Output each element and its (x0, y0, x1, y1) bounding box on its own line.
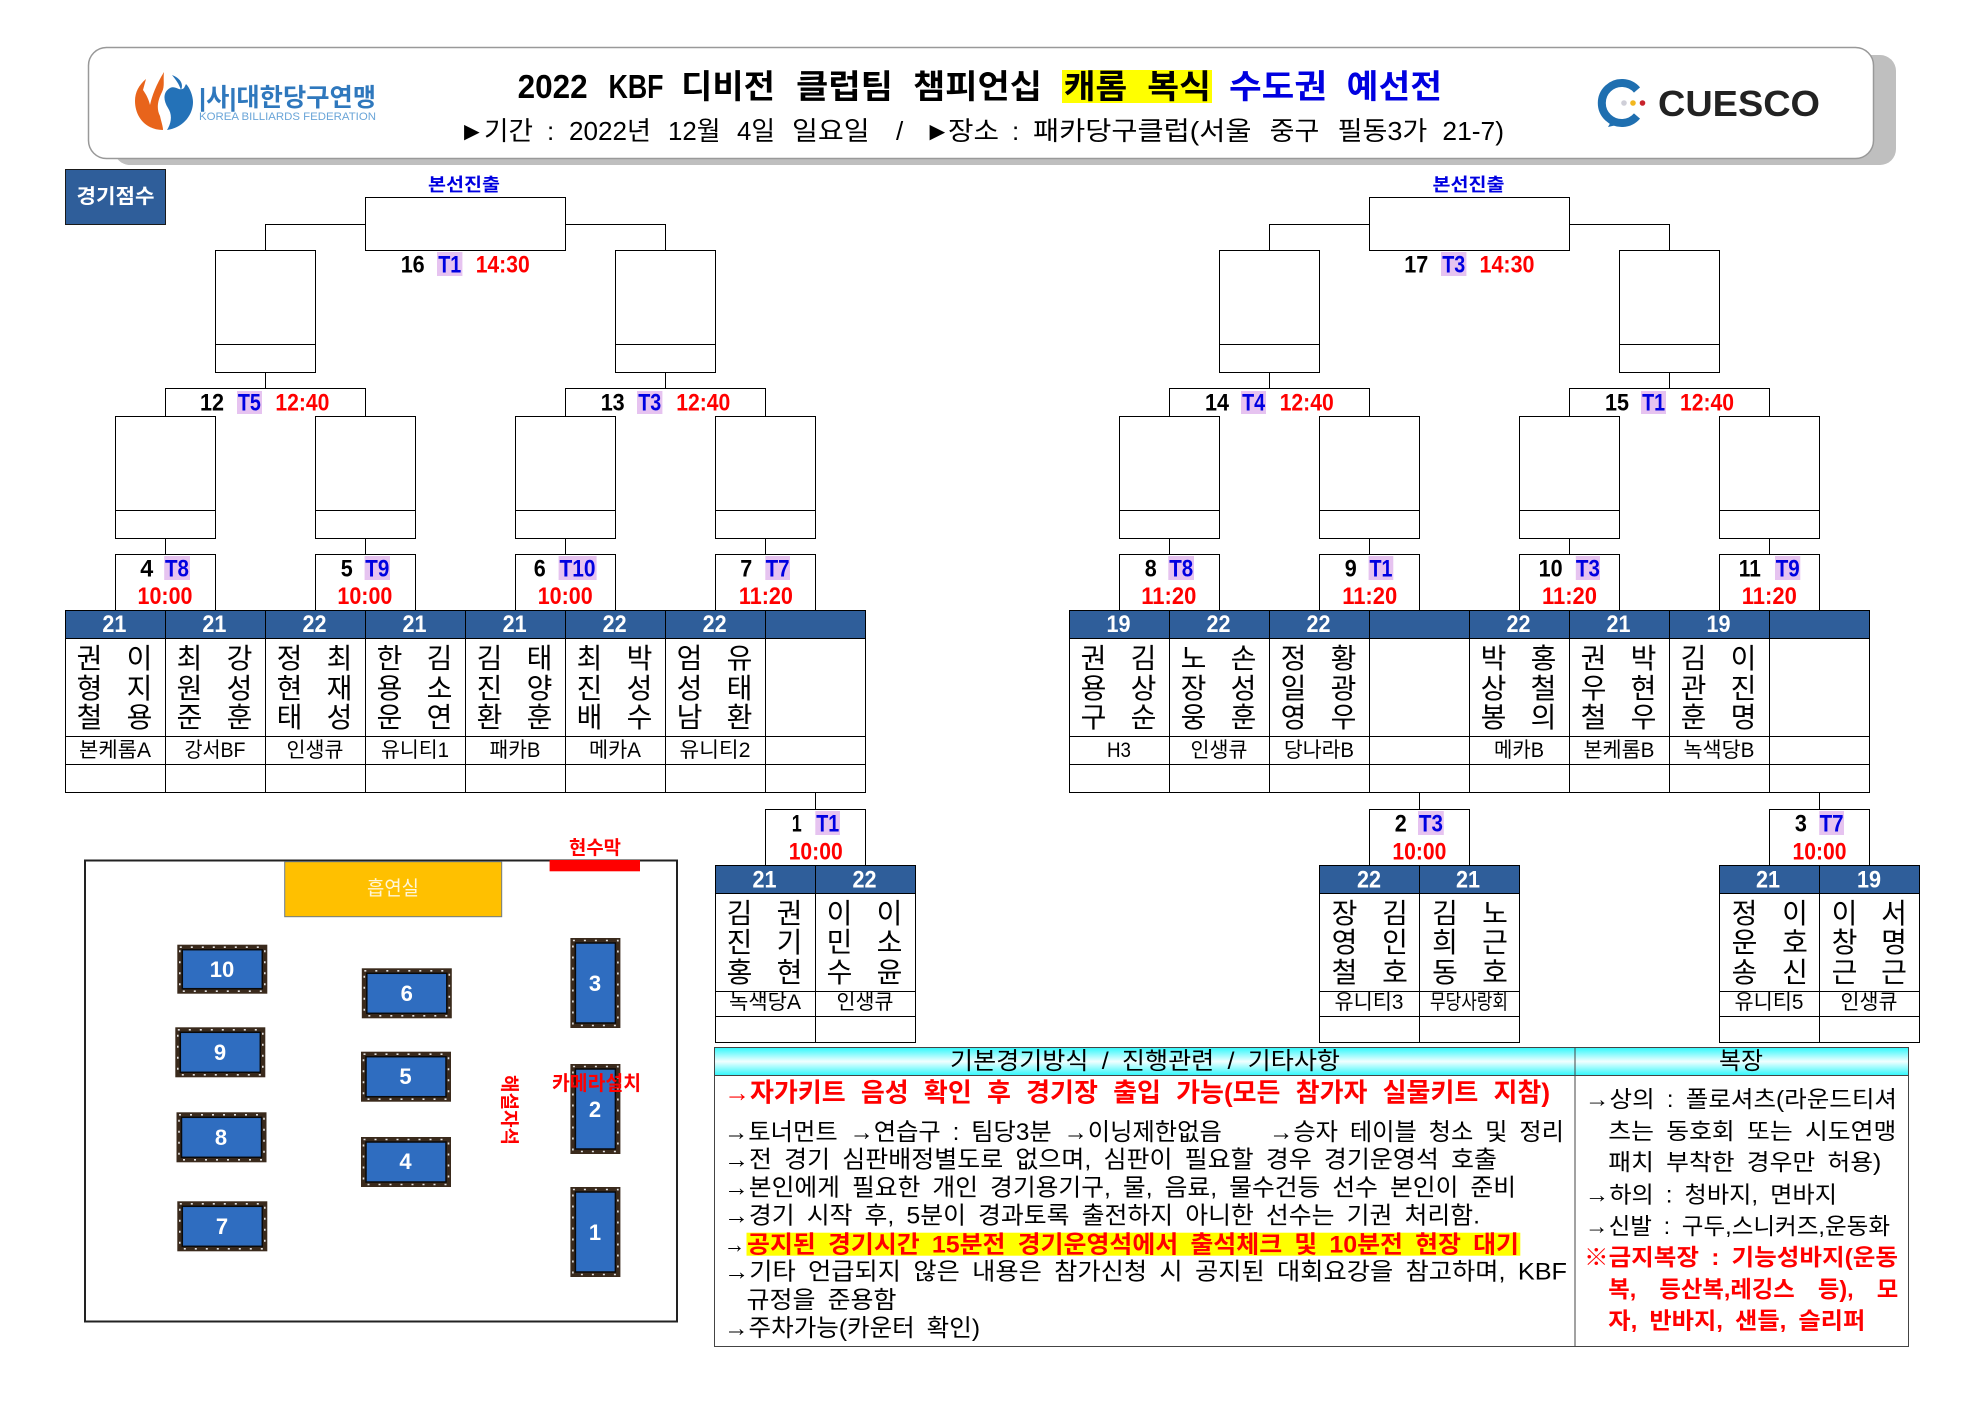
match 7: 11:20 (739, 583, 793, 610)
quarterfinal boxes right (1120, 416, 1820, 538)
title: 복식 (1147, 68, 1211, 105)
match 2 block: 노근호 (1482, 898, 1508, 988)
table 7 (177, 1201, 267, 1251)
match 17 label (1404, 252, 1534, 278)
team names left: 인생큐 (286, 739, 344, 762)
subtitle: date and venue: 일요일 (792, 116, 870, 146)
match 1 block: 권기현 (777, 898, 802, 988)
subtitle: date and venue: 중구 (1270, 116, 1319, 146)
team names left (79, 739, 750, 762)
match 17 label: 14:30 (1480, 252, 1534, 278)
match 14 box: 12:40 (1280, 390, 1334, 416)
scores row left: 22 (603, 611, 627, 638)
match 10 (1539, 556, 1600, 610)
smoking room: 흡연실 (367, 877, 419, 900)
match 9: 11:20 (1342, 583, 1397, 610)
match 5: T9 (365, 556, 389, 582)
match 3 block: 이호신 (1782, 898, 1808, 988)
team names left: 강서BF (184, 739, 246, 762)
main draw label left: 본선진출 (428, 175, 500, 195)
match 8: 8 (1145, 556, 1157, 582)
player names left: 김소연 (427, 643, 452, 733)
scores row left (102, 611, 727, 638)
player names left: 한용운 (377, 643, 402, 733)
subtitle: date and venue: 장소 (948, 116, 999, 146)
player names right: 손성훈 (1231, 643, 1256, 733)
logo: Korea Billiards Federation (135, 72, 376, 130)
match 5 (337, 556, 392, 610)
quarterfinal boxes left (116, 416, 816, 538)
table 3 (570, 938, 620, 1028)
player names left: 최재성 (327, 643, 352, 733)
table 4: 4 (399, 1149, 412, 1174)
game score badge: 경기점수 (76, 185, 154, 208)
match 2 block (1320, 792, 1520, 1042)
match 13 box: T3 (638, 390, 661, 416)
team names right: 메카B (1494, 739, 1544, 762)
match 2 block: T3 (1419, 810, 1443, 838)
match 15 box: 12:40 (1680, 390, 1734, 416)
match 12 box: 12 (200, 390, 224, 416)
match 3 block: 유니티5 (1734, 991, 1804, 1014)
team names right: 인생큐 (1190, 739, 1248, 762)
rules text: 공지된 경기시간 15분전 경기운영석에서 출석체크 및 10분전 현장 대기 (747, 1232, 1519, 1258)
match 1 block: 인생큐 (836, 991, 894, 1014)
final box right (1370, 198, 1570, 250)
match 10: 11:20 (1542, 583, 1597, 610)
banner (550, 837, 640, 871)
team names right: H3 (1107, 739, 1131, 762)
match 3 block: 19 (1857, 866, 1881, 894)
rules text: →기타 언급되지 않은 내용은 참가신청 시 공지된 대회요강을 참고하며, KBF (724, 1258, 1567, 1286)
table 8 (176, 1112, 266, 1162)
player names right: 박현우 (1631, 643, 1656, 733)
main draw label right: 본선진출 (1432, 175, 1504, 195)
right player table (1070, 610, 1870, 792)
player names right: 노장웅 (1181, 643, 1206, 733)
match headers right row (1120, 554, 1820, 610)
match 14 box: T4 (1242, 390, 1265, 416)
player names right: 김상순 (1131, 643, 1156, 733)
dress code heading: 복장 (1719, 1048, 1763, 1075)
team names left: 본케롬A (79, 739, 151, 762)
title: 디비전 (681, 68, 775, 105)
match headers left row (116, 554, 816, 610)
table 2: 2 (589, 1097, 601, 1122)
match 1 block: 1 (792, 810, 802, 838)
table 1: 1 (589, 1220, 601, 1245)
table 5: 5 (399, 1064, 412, 1089)
title: 챔피언십 (913, 68, 1042, 105)
banner: 현수막 (569, 837, 621, 859)
match 16 label (401, 252, 530, 278)
match 13 box (566, 388, 766, 416)
rules text: →본인에게 필요한 개인 경기용기구, 물, 음료, 물수건등 선수 본인이 준비 (724, 1174, 1516, 1202)
match 3 block: 서명근 (1881, 898, 1907, 988)
title: 클럽팀 (796, 68, 893, 105)
subtitle: date and venue (459, 116, 1504, 146)
scores row right: 19 (1106, 611, 1130, 638)
final box left (366, 198, 566, 250)
dress code text: 자, 반바지, 샌들, 슬리퍼 (1608, 1308, 1865, 1334)
match 15 box: T1 (1642, 390, 1665, 416)
match 14 box: 14 (1205, 390, 1229, 416)
rules text: 규정을 준용함 (746, 1287, 896, 1314)
match 4: 4 (140, 556, 154, 582)
match 1 block: 21 (752, 866, 776, 894)
match 12 box (166, 388, 366, 416)
match 4 (138, 556, 192, 610)
dress code text: 패치 부착한 경우만 허용) (1608, 1149, 1881, 1175)
match 12 box: 12:40 (275, 390, 329, 416)
team names left: 유니티2 (680, 739, 750, 762)
header panel (88, 48, 1896, 165)
scores row right: 22 (1206, 611, 1230, 638)
player names right: 황광우 (1331, 643, 1356, 733)
rules text: →토너먼트 →연습구 : 팀당3분 →이닝제한없음 →승자 테이블 청소 및 정리 (724, 1119, 1564, 1146)
table 5 (361, 1052, 451, 1102)
logo: CUESCO: CUESCO (1658, 83, 1820, 124)
table 3: 3 (589, 971, 601, 996)
match 6 (534, 556, 597, 610)
scores row left: 21 (503, 611, 527, 638)
match 6: 6 (534, 556, 546, 582)
player names right: 이진명 (1731, 643, 1756, 733)
title: 2022 (518, 68, 588, 105)
rules text (724, 1078, 1567, 1342)
scores row left: 22 (703, 611, 727, 638)
match 13 box: 13 (601, 390, 625, 416)
dress code text: →상의 : 폴로셔츠(라운드티셔 (1585, 1086, 1897, 1112)
player names left: 엄성남 (677, 643, 702, 733)
match 1 block (716, 792, 916, 1042)
player names right: 박상봉 (1481, 643, 1506, 733)
match 16 label: 16 (401, 252, 425, 278)
match 1 block: 녹색당A (729, 991, 801, 1014)
team names right (1107, 739, 1754, 762)
match 1 block: 김진홍 (727, 898, 752, 988)
player names left: 김진환 (477, 643, 502, 733)
player names left: 박성수 (627, 643, 652, 733)
subtitle: date and venue: 필동3가 (1338, 116, 1427, 146)
team names left: 메카A (589, 739, 641, 762)
match 15 box (1570, 388, 1770, 416)
match 3 block: T7 (1820, 810, 1844, 838)
title: KBF (608, 68, 664, 105)
subtitle: date and venue: : (547, 116, 554, 146)
camera location label: 카메라설치 (552, 1072, 641, 1095)
logo: Korea Billiards Federation: KOREA BILLIARDS FEDERATION (199, 111, 376, 123)
team names left: 패카B (490, 739, 540, 762)
connector lines right (1170, 224, 1770, 554)
player names left: 유태환 (727, 643, 752, 733)
match 6: T10 (560, 556, 596, 582)
match 1 block: 22 (852, 866, 876, 894)
match 3 block: 이창근 (1832, 898, 1857, 988)
match 1 block: T1 (816, 810, 839, 838)
match 4: 10:00 (138, 583, 192, 610)
match 10: 10 (1539, 556, 1563, 582)
dress code text (1584, 1086, 1898, 1334)
match 8: T8 (1169, 556, 1193, 582)
player names left: 최진배 (577, 643, 602, 733)
match 1 block: 10:00 (789, 838, 843, 866)
player names left: 권형철 (77, 643, 102, 733)
commentator seat label: 해설자석 (498, 1075, 520, 1145)
dress code text: 복, 등산복,레깅스 등), 모 (1608, 1276, 1898, 1302)
table 10: 10 (210, 957, 234, 982)
title: 수도권 (1229, 68, 1327, 105)
match 2 block: 무당사랑회 (1430, 991, 1508, 1014)
match 9 (1342, 556, 1397, 610)
table 2 (570, 1064, 620, 1154)
table 8: 8 (215, 1125, 227, 1150)
match 11 (1739, 556, 1800, 610)
scores row left: 22 (302, 611, 326, 638)
match 3 block: 정운송 (1732, 898, 1757, 988)
subtitle: date and venue: 기간 (484, 116, 533, 146)
match 7: T7 (766, 556, 790, 582)
player names right: 정일영 (1281, 643, 1306, 733)
match 15 box: 15 (1605, 390, 1629, 416)
semifinal boxes left (216, 250, 716, 372)
match 2 block: 22 (1357, 866, 1381, 894)
left player table (66, 610, 866, 792)
subtitle: date and venue: : (1012, 116, 1019, 146)
scores row left: 21 (102, 611, 126, 638)
match 8 (1141, 556, 1196, 610)
dress code text: →신발 : 구두,스니커즈,운동화 (1585, 1213, 1890, 1239)
rules text: →자가키트 음성 확인 후 경기장 출입 가능(모든 참가자 실물키트 지참) (724, 1078, 1550, 1108)
match 11: T9 (1776, 556, 1800, 582)
player names left: 정현태 (277, 643, 302, 733)
table 6: 6 (401, 981, 413, 1006)
match 3 block (1720, 792, 1920, 1042)
logo: CUESCO (1602, 83, 1820, 127)
rules text: →경기 시작 후, 5분이 경과토록 출전하지 아니한 선수는 기권 처리함. (724, 1202, 1480, 1230)
rules text: →주차가능(카운터 확인) (724, 1315, 980, 1342)
table 9 (175, 1027, 265, 1077)
match 10: T3 (1576, 556, 1600, 582)
dress code text: →하의 : 청바지, 면바지 (1585, 1182, 1837, 1208)
match 2 block: 김인호 (1382, 898, 1408, 988)
rules and dress code table (714, 1048, 1908, 1346)
match 2 block: 김희동 (1432, 898, 1458, 988)
match 17 label: 17 (1404, 252, 1428, 278)
smoking room (285, 862, 502, 917)
table 4 (361, 1137, 451, 1187)
match 7: 7 (740, 556, 752, 582)
subtitle: date and venue: / (896, 116, 904, 146)
player names left: 태양훈 (527, 643, 552, 733)
dress code text: ※금지복장 : 기능성바지(운동 (1584, 1244, 1898, 1270)
semifinal boxes right (1220, 250, 1720, 372)
match 3 block: 3 (1795, 810, 1807, 838)
table 10 (177, 945, 267, 994)
match 6: 10:00 (538, 583, 593, 610)
match 16 label: T1 (438, 252, 461, 278)
match 3 block: 10:00 (1792, 838, 1846, 866)
connector lines left (166, 224, 766, 554)
player names left (77, 643, 752, 733)
match 2 block: 10:00 (1392, 838, 1446, 866)
scores row left: 21 (202, 611, 226, 638)
scores row right: 22 (1506, 611, 1530, 638)
match 17 label: T3 (1442, 252, 1465, 278)
match 2 block: 유니티3 (1334, 991, 1404, 1014)
team names left: 유니티1 (381, 739, 449, 762)
scores row right: 22 (1306, 611, 1330, 638)
table 9: 9 (214, 1040, 226, 1065)
player names left: 최원준 (177, 643, 202, 733)
scores row right (1106, 611, 1730, 638)
subtitle: date and venue: 패카당구클럽(서울 (1033, 116, 1252, 146)
player names right: 홍철의 (1531, 643, 1556, 733)
subtitle: date and venue: ► (459, 116, 485, 146)
match 8: 11:20 (1141, 583, 1196, 610)
right bracket upper rounds (1120, 175, 1820, 554)
title: 예선전 (1347, 68, 1442, 105)
match 9: 9 (1345, 556, 1357, 582)
subtitle: date and venue: ► (924, 116, 950, 146)
table 1 (570, 1187, 620, 1277)
match 1 block: 이민수 (827, 898, 852, 988)
scores row right: 21 (1606, 611, 1630, 638)
match 2 block: 21 (1456, 866, 1480, 894)
subtitle: date and venue: 12월 (668, 116, 721, 146)
match 16 label: 14:30 (476, 252, 530, 278)
match 5: 5 (341, 556, 353, 582)
scores row left: 21 (402, 611, 426, 638)
match 11: 11 (1739, 556, 1761, 582)
match 13 box: 12:40 (676, 390, 730, 416)
match 3 block: 인생큐 (1840, 991, 1898, 1014)
match 2 block: 장영철 (1332, 898, 1357, 988)
dress code text: 츠는 동호회 또는 시도연맹 (1608, 1118, 1896, 1144)
rules text: → (724, 1232, 745, 1258)
team names right: 당나라B (1284, 739, 1354, 762)
player names left: 강성훈 (227, 643, 252, 733)
title: 캐롬 (1064, 68, 1127, 105)
rules heading: 기본경기방식 / 진행관련 / 기타사항 (950, 1048, 1340, 1075)
venue floor plan (85, 837, 677, 1322)
match 7 (739, 556, 793, 610)
table 7: 7 (216, 1214, 228, 1239)
left bracket upper rounds (116, 175, 816, 554)
match 9: T1 (1370, 556, 1392, 582)
player names right: 김관훈 (1681, 643, 1706, 733)
subtitle: date and venue: 2022년 (569, 116, 651, 146)
rules text: →전 경기 심판배정별도로 없으며, 심판이 필요할 경우 경기운영석 호출 (724, 1146, 1497, 1174)
player names right (1081, 643, 1756, 733)
match 4: T8 (165, 556, 189, 582)
title (518, 68, 1442, 105)
table 6 (362, 968, 452, 1018)
match 5: 10:00 (337, 583, 392, 610)
logo: Korea Billiards Federation: |사|대한당구연맹 (199, 84, 376, 112)
team names right: 본케롬B (1584, 739, 1654, 762)
player names right: 권용구 (1081, 643, 1106, 733)
game score badge (66, 170, 166, 224)
match 11: 11:20 (1742, 583, 1797, 610)
match 1 block: 이소윤 (877, 898, 902, 988)
subtitle: date and venue: 4일 (737, 116, 775, 146)
match 14 box (1170, 388, 1370, 416)
player names left: 이지용 (127, 643, 152, 733)
match 3 block: 21 (1756, 866, 1780, 894)
subtitle: date and venue: 21-7) (1442, 116, 1504, 146)
team names right: 녹색당B (1684, 739, 1754, 762)
player names right: 권우철 (1581, 643, 1606, 733)
match 2 block: 2 (1395, 810, 1407, 838)
match 12 box: T5 (238, 390, 261, 416)
scores row right: 19 (1706, 611, 1730, 638)
